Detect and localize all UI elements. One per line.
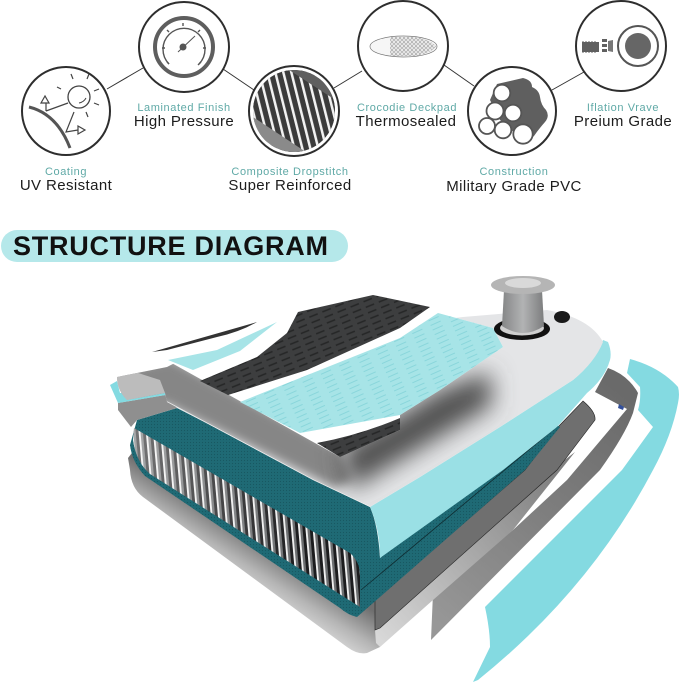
deckpad black sliver [152,322,257,352]
cyan rail [370,340,611,558]
outer grey shell [431,368,638,640]
label: UV Resistant: Coating [45,166,87,178]
deckpad lower black [317,418,400,457]
deckpad white sheet [152,295,503,457]
fabric seam [361,428,555,590]
icon: pressure gauge [139,2,229,92]
label: Thermosealed: Crocodie Deckpad [357,102,457,114]
label: Super Reinforced: Composite Dropstitch [231,166,349,178]
valve base ring [494,318,550,340]
label: Military Grade PVC: Construction [480,166,548,178]
board top surface [117,310,603,507]
bottom grey layer [128,430,380,653]
icon: UV coating [22,67,110,155]
shading on board [117,358,492,507]
valve cap [491,276,555,294]
valve cylinder [502,290,544,333]
icon: dropstitch [249,66,340,156]
label: Military Grade PVC: Military Grade PVC [446,178,582,195]
deckpad cyan sliver [168,322,277,370]
label: Super Reinforced: Super Reinforced [228,177,352,194]
blue valve detail [618,404,624,410]
heading: structure diagram: STRUCTURE DIAGRAM [13,231,328,261]
label: High Pressure: High Pressure [134,113,234,130]
valve button [554,311,570,323]
inner fold left [118,395,177,427]
label: Thermosealed: Thermosealed [356,113,456,130]
label: Super Reinforced [228,166,352,194]
inner grey shell [375,401,595,630]
icon: deckpad surfboard [358,1,448,91]
label: UV Resistant [20,166,113,194]
label: Preium Grade: Preium Grade [574,113,672,130]
label: High Pressure: Laminated Finish [137,102,231,114]
lighter rail strip [375,452,575,647]
label: Thermosealed [356,102,457,130]
icon: inflation valve [576,1,666,91]
icon: PVC tubes [468,67,556,155]
deckpad main cyan [240,313,503,433]
label: Preium Grade: Iflation Vrave [587,102,659,114]
label: Preium Grade [574,102,672,130]
label: UV Resistant: UV Resistant [20,177,113,194]
connector lines [107,65,584,90]
deckpad main black [200,295,430,395]
label: Military Grade PVC [446,166,582,195]
teal fabric [130,408,560,617]
cyan outer rail [473,359,679,682]
diagram: board cross-section [110,276,679,682]
label: High Pressure [134,102,234,130]
dropstitch fibres [133,428,360,607]
